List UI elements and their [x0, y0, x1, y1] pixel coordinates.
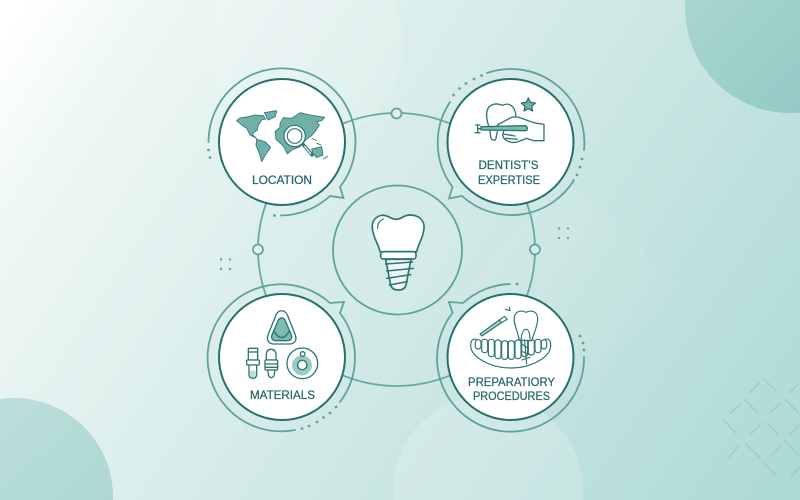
connector node left [253, 244, 263, 254]
label: materials: MATERIALS [250, 390, 315, 402]
decorative diamond lattice [723, 378, 799, 478]
outer ring with pointer [208, 284, 355, 431]
background shape: light circle top [207, 0, 403, 143]
background shape: light circle bottom [393, 395, 583, 500]
outer ring with pointer [208, 68, 355, 216]
ring dots [452, 74, 583, 176]
connector node top [392, 108, 402, 118]
icon: teeth arch with tooth and syringe [471, 307, 551, 368]
white disc [219, 294, 345, 420]
outer ring with pointer [437, 284, 584, 432]
connector node right [530, 244, 540, 254]
icon: dental implant [372, 215, 424, 290]
outer ring with pointer [438, 102, 574, 215]
ring dots [207, 149, 276, 217]
icon: implant materials [247, 311, 318, 379]
background shape: top right circle [685, 0, 800, 113]
label: location: LOCATION [252, 175, 312, 187]
connecting ring [258, 113, 535, 386]
white disc [219, 79, 345, 205]
white disc [448, 79, 574, 205]
ring dots [301, 406, 337, 430]
dot grid right [558, 227, 569, 239]
icon: hand holding dental tool with tooth and star [475, 98, 544, 142]
center implant panel [333, 186, 462, 314]
background shape: diamond [450, 175, 680, 400]
white disc [448, 294, 574, 420]
ring dots [516, 283, 585, 351]
icon: world map with magnifier [237, 111, 328, 162]
label: dentist's: DENTIST’S [478, 160, 539, 172]
panel: dentist's expertise [438, 69, 584, 215]
panel: location [207, 68, 355, 217]
label: preparatiory: PREPARATIORY [468, 377, 555, 389]
outer ring upper arc [487, 69, 584, 150]
background shape: bottom left circle [0, 398, 113, 500]
panel: materials [208, 284, 355, 431]
center ring [333, 186, 462, 314]
label: procedures: PROCEDURES [473, 391, 550, 403]
dot grid left [220, 258, 231, 270]
panel: preparatory procedures [437, 283, 585, 432]
label: expertise: EXPERTISE [478, 175, 540, 187]
